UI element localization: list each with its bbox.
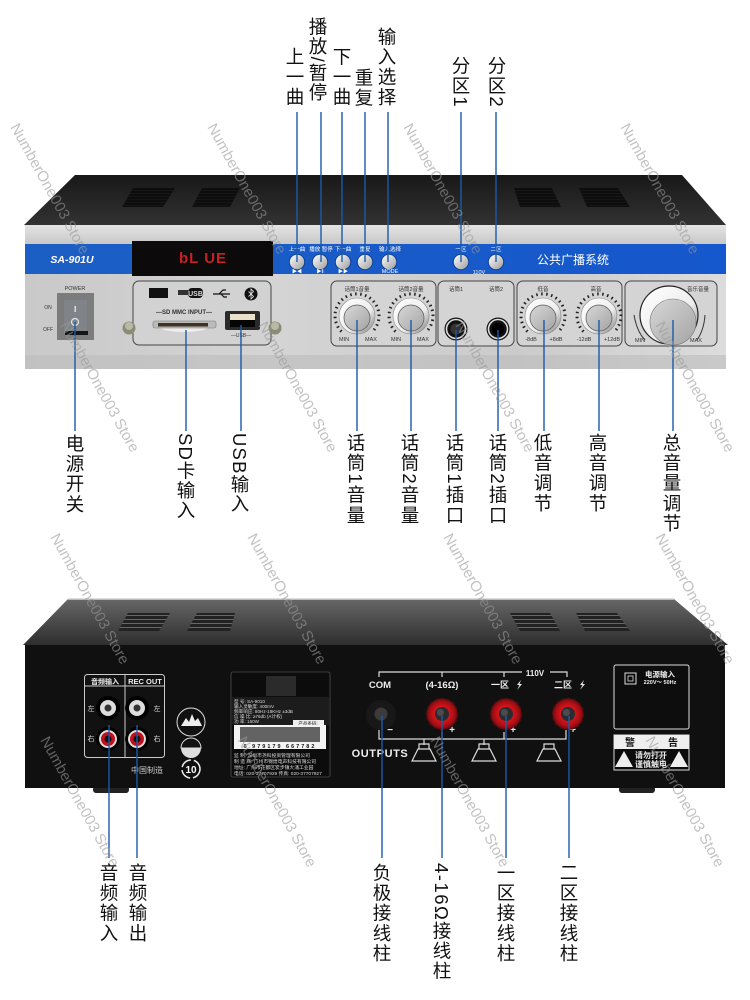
- certification icons: 10: [185, 765, 197, 776]
- microphone volume knobs: MAX: [365, 337, 377, 343]
- tone knobs: +12dB: [604, 337, 620, 343]
- media panel: —SD MMC INPUT—: [156, 310, 212, 316]
- buttons: 播放 暂停: [309, 245, 333, 253]
- power input box: 220V～ 50Hz: [644, 680, 677, 686]
- watermarks: NumberOne003 Store: [204, 121, 290, 257]
- label: 4-16 ohm terminal: 4-16Ω接线柱: [431, 863, 452, 981]
- master volume knob: 音乐音量: [687, 285, 709, 293]
- watermarks: NumberOne003 Store: [37, 734, 123, 870]
- tone knobs: +8dB: [550, 337, 563, 343]
- front-panel amplifier: [24, 175, 726, 369]
- top cover: [23, 599, 728, 645]
- output terminal text: +: [570, 725, 576, 736]
- audio input and output block: [84, 674, 164, 758]
- media panel: —USB—: [231, 333, 251, 339]
- watermarks: NumberOne003 Store: [234, 734, 320, 870]
- label: zone 2: 分区2: [486, 56, 507, 108]
- label: input select: 输入选择: [376, 27, 397, 108]
- master volume knob: MAX: [690, 338, 702, 344]
- output terminal text: (4-16Ω): [426, 680, 458, 691]
- buttons: 一区: [455, 246, 467, 253]
- buttons: 下一曲: [335, 245, 351, 253]
- buttons: ▶◀: [292, 269, 302, 275]
- microphone volume knobs: [331, 281, 436, 346]
- watermarks: NumberOne003 Store: [47, 531, 133, 667]
- buttons: 二区: [490, 246, 502, 253]
- audio input and output block: 左: [88, 704, 94, 713]
- specification label: 地址: 广州市花都区炭步镇大涌工业园: [234, 764, 314, 771]
- power switch: ON: [44, 305, 52, 311]
- specification label: 输入灵敏度: 400mV: [234, 703, 275, 710]
- lightning bolts: [517, 680, 585, 690]
- specification label: 信 噪 比: ≥76db (A计权): [234, 713, 283, 720]
- audio input and output block: 右: [88, 734, 94, 743]
- specification label: 型 号: SA-9010: [234, 698, 265, 705]
- tone knobs: -8dB: [525, 337, 537, 343]
- warning label: [614, 735, 689, 770]
- tone knobs: -12dB: [577, 337, 592, 343]
- specification label: 监 制: 深圳市尧科投资管理有限公司: [234, 752, 310, 759]
- model name: SA-901U: [50, 254, 94, 266]
- rear-panel amplifier: [23, 598, 728, 793]
- audio input and output block: 左: [154, 704, 160, 713]
- label: audio input: 音频输入: [98, 863, 119, 944]
- label: mic 2 volume: 话筒2音量: [399, 433, 420, 526]
- tone knobs: 高音: [590, 285, 602, 293]
- microphone volume knobs: MIN: [339, 337, 349, 343]
- watermarks: NumberOne003 Store: [427, 734, 513, 870]
- specification label: 功 率: 150W: [234, 718, 260, 725]
- tone knobs: 低音: [537, 285, 549, 293]
- buttons: [289, 245, 504, 276]
- buttons: 重复: [359, 245, 371, 253]
- warning label: 告: [668, 736, 678, 749]
- LED display: [132, 241, 273, 276]
- buttons: MODE: [382, 269, 399, 275]
- label: previous track: 上一曲: [284, 47, 305, 108]
- COM terminal: [366, 700, 396, 730]
- label: mic 1 volume: 话筒1音量: [345, 433, 366, 526]
- watermarks: NumberOne003 Store: [440, 531, 526, 667]
- power switch: OFF: [43, 327, 53, 333]
- power switch: [43, 286, 94, 340]
- media panel: USB: [188, 291, 203, 298]
- label: mic 2 jack: 话筒2插口: [487, 433, 508, 526]
- output terminal text: +: [449, 725, 455, 736]
- microphone volume knobs: MIN: [391, 337, 401, 343]
- power input box: [614, 665, 689, 729]
- speaker symbols: [412, 744, 561, 761]
- output terminal text: [352, 669, 576, 760]
- watermarks: NumberOne003 Store: [255, 319, 341, 455]
- microphone volume knobs: MAX: [417, 337, 429, 343]
- power input box: 电源输入: [645, 669, 675, 679]
- output terminal wiring: [379, 672, 567, 745]
- buttons: 上一曲: [289, 245, 305, 253]
- output terminal text: COM: [369, 680, 391, 691]
- blue band: [25, 244, 726, 274]
- output terminal text: 110V: [526, 669, 545, 678]
- specification label: [231, 672, 330, 777]
- microphone jacks: [438, 281, 514, 346]
- LED display: bL UE: [179, 250, 227, 267]
- specification label: 6 979179 667782: [244, 744, 316, 750]
- buttons: ▶▶: [338, 269, 348, 275]
- audio input and output block: REC OUT: [128, 677, 162, 686]
- buttons: 输入选择: [379, 245, 401, 253]
- microphone volume knobs: 话筒1音量: [344, 285, 370, 293]
- made in China: 中国制造: [131, 765, 163, 775]
- warning label: 谨慎触电: [635, 759, 667, 769]
- feet: [93, 786, 129, 793]
- media panel: [122, 281, 282, 345]
- microphone volume knobs: 话筒2音量: [398, 285, 424, 293]
- label: next track: 下一曲: [331, 47, 352, 108]
- label: play pause: 播放/暂停: [307, 17, 328, 103]
- power switch: POWER: [65, 286, 85, 292]
- label: negative terminal: 负极接线柱: [371, 863, 392, 964]
- output terminal text: OUTPUTS: [352, 748, 408, 760]
- label: repeat: 重复: [353, 68, 374, 108]
- label: USB input: USB输入: [229, 433, 250, 514]
- label: treble adjust: 高音调节: [587, 433, 608, 514]
- audio input and output block: 右: [154, 734, 160, 743]
- rear panel: [25, 645, 725, 788]
- label: bass adjust: 低音调节: [532, 433, 553, 514]
- output terminal text: 二区: [554, 680, 572, 690]
- warning label: 请勿打开: [635, 750, 667, 760]
- specification label: 制 造 商: 广州市锦煌电声科技有限公司: [234, 758, 316, 765]
- front panel: [25, 225, 726, 369]
- watermarks: NumberOne003 Store: [642, 734, 728, 870]
- audio input and output block: 音频输入: [91, 677, 119, 686]
- watermarks: NumberOne003 Store: [652, 319, 738, 455]
- output terminal text: −: [387, 725, 393, 736]
- label: SD card input: SD卡输入: [175, 433, 196, 520]
- label: power switch: 电源开关: [64, 434, 85, 515]
- specification label: 产品条码:: [298, 720, 318, 727]
- label: mic 1 jack: 话筒1插口: [444, 433, 465, 526]
- callout lines: [75, 112, 673, 858]
- specification label: 频率响应: 80Hz-18KHz ±3dB: [234, 708, 293, 715]
- watermarks: NumberOne003 Store: [652, 531, 738, 667]
- certification icons: [177, 708, 205, 778]
- label: zone 2 terminal: 二区接线柱: [558, 863, 579, 964]
- warning label: 警: [625, 736, 635, 749]
- red speaker terminals: [426, 698, 584, 730]
- label: zone 1: 分区1: [450, 56, 471, 108]
- master volume knob: [625, 281, 717, 346]
- microphone jacks: 话筒1: [449, 285, 463, 293]
- master volume knob: MIN: [635, 338, 645, 344]
- system title: 公共广播系统: [537, 253, 609, 267]
- buttons: 110V: [473, 270, 486, 276]
- specification label: 电话: 020-37707929 传真: 020-37707927: [234, 770, 322, 777]
- tone knobs: [517, 281, 622, 346]
- top vents: [122, 188, 630, 207]
- top cover: [24, 175, 726, 225]
- watermarks: NumberOne003 Store: [57, 319, 143, 455]
- buttons: ▶‖: [316, 269, 324, 275]
- label: audio output: 音频输出: [127, 863, 148, 944]
- watermarks: [7, 121, 738, 870]
- label: zone 1 terminal: 一区接线柱: [495, 863, 516, 964]
- output terminal text: 一区: [491, 680, 509, 690]
- microphone jacks: 话筒2: [489, 285, 503, 293]
- watermarks: NumberOne003 Store: [452, 319, 538, 455]
- watermarks: NumberOne003 Store: [244, 531, 330, 667]
- label: master volume adjust: 总音量调节: [661, 433, 682, 534]
- top vents: [118, 613, 630, 631]
- watermarks: NumberOne003 Store: [400, 121, 486, 257]
- watermarks: NumberOne003 Store: [7, 121, 93, 257]
- output terminal text: +: [510, 725, 516, 736]
- watermarks: NumberOne003 Store: [617, 121, 703, 257]
